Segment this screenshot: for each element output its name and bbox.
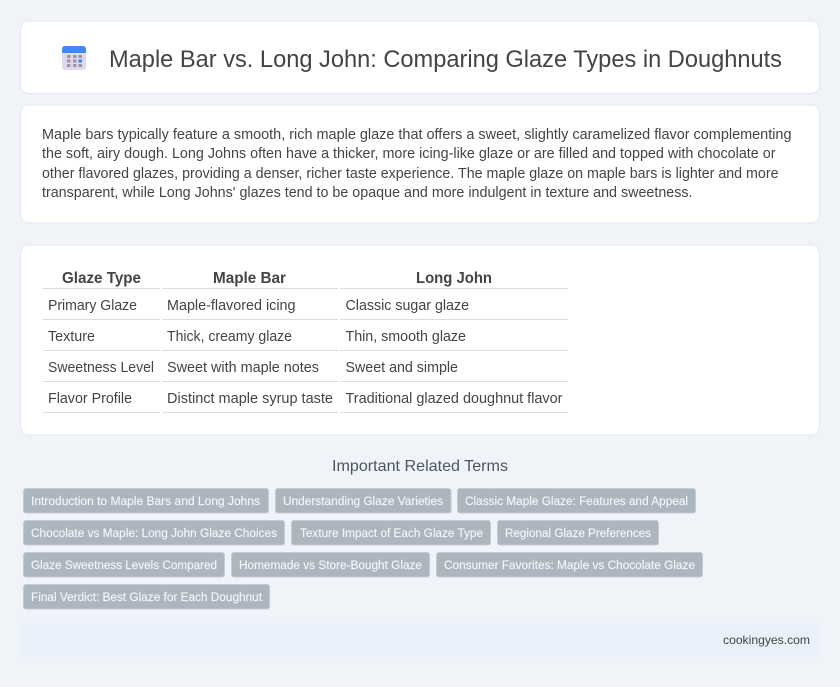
table header: Long John <box>416 270 492 287</box>
table row: sweetness level: Sweet and simple <box>346 360 458 376</box>
tag: Understanding Glaze Varieties <box>283 494 443 508</box>
related terms tags <box>24 488 702 609</box>
text block: description: the soft, airy dough. Long Johns often have a thicker, more icing-like glaze or are filled and topped with chocolate or <box>42 146 776 162</box>
table row: primary glaze <box>48 298 469 314</box>
table row: flavor profile: Traditional glazed doughnut flavor <box>346 391 563 407</box>
table row: texture: Texture <box>48 329 95 345</box>
tag <box>24 520 284 545</box>
tag: Classic Maple Glaze: Features and Appeal <box>465 494 688 508</box>
tag <box>292 520 490 545</box>
table row: flavor profile: Distinct maple syrup taste <box>167 391 333 407</box>
table header: Maple Bar <box>213 270 286 287</box>
tag <box>24 584 270 609</box>
tag <box>436 552 702 577</box>
table row: primary glaze: Maple-flavored icing <box>167 298 296 314</box>
table row: texture: Thin, smooth glaze <box>346 329 466 345</box>
footer credit: cookingyes.com <box>723 633 810 647</box>
text block: description: Maple bars typically feature a smooth, rich maple glaze that offers a sweet, slightly caramelized flavor complementing <box>42 127 792 143</box>
table row: texture: Thick, creamy glaze <box>167 329 292 345</box>
tag <box>276 488 451 513</box>
table row: primary glaze: Primary Glaze <box>48 298 137 314</box>
table row: texture <box>48 329 466 345</box>
tag <box>458 488 696 513</box>
text block: description: other flavored glazes, providing a denser, richer taste experience. The maple glaze on maple bars is lighter and more <box>42 166 778 182</box>
icon: calendar <box>62 46 86 70</box>
table header <box>62 270 492 287</box>
tag: Consumer Favorites: Maple vs Chocolate Glaze <box>444 558 695 572</box>
heading: important related terms: Important Related Terms <box>332 458 508 475</box>
table row: flavor profile: Flavor Profile <box>48 391 132 407</box>
tag: Homemade vs Store-Bought Glaze <box>239 558 422 572</box>
panel: comparison table <box>20 245 820 435</box>
table row: sweetness level <box>48 360 458 376</box>
tag: Glaze Sweetness Levels Compared <box>31 558 217 572</box>
table row: sweetness level: Sweetness Level <box>48 360 154 376</box>
table row: flavor profile <box>48 391 563 407</box>
table row: primary glaze: Classic sugar glaze <box>346 298 469 314</box>
tag: Final Verdict: Best Glaze for Each Doughnut <box>31 590 263 604</box>
title: Maple Bar vs. Long John: Comparing Glaze Types in Doughnuts <box>109 46 782 73</box>
table header: Glaze Type <box>62 270 141 287</box>
tag <box>232 552 430 577</box>
panel: description <box>20 105 820 223</box>
tag <box>24 552 224 577</box>
footer <box>20 623 820 657</box>
header panel <box>20 21 820 94</box>
text block: description: transparent, while Long Johns' glazes tend to be opaque and more indulgent in texture and sweetness. <box>42 185 692 201</box>
tag: Introduction to Maple Bars and Long Johns <box>31 494 260 508</box>
tag: Texture Impact of Each Glaze Type <box>300 526 483 540</box>
tag <box>24 488 268 513</box>
tag <box>498 520 658 545</box>
text block: description <box>42 127 792 201</box>
tag: Regional Glaze Preferences <box>505 526 651 540</box>
table row: sweetness level: Sweet with maple notes <box>167 360 319 376</box>
tag: Chocolate vs Maple: Long John Glaze Choices <box>31 526 277 540</box>
